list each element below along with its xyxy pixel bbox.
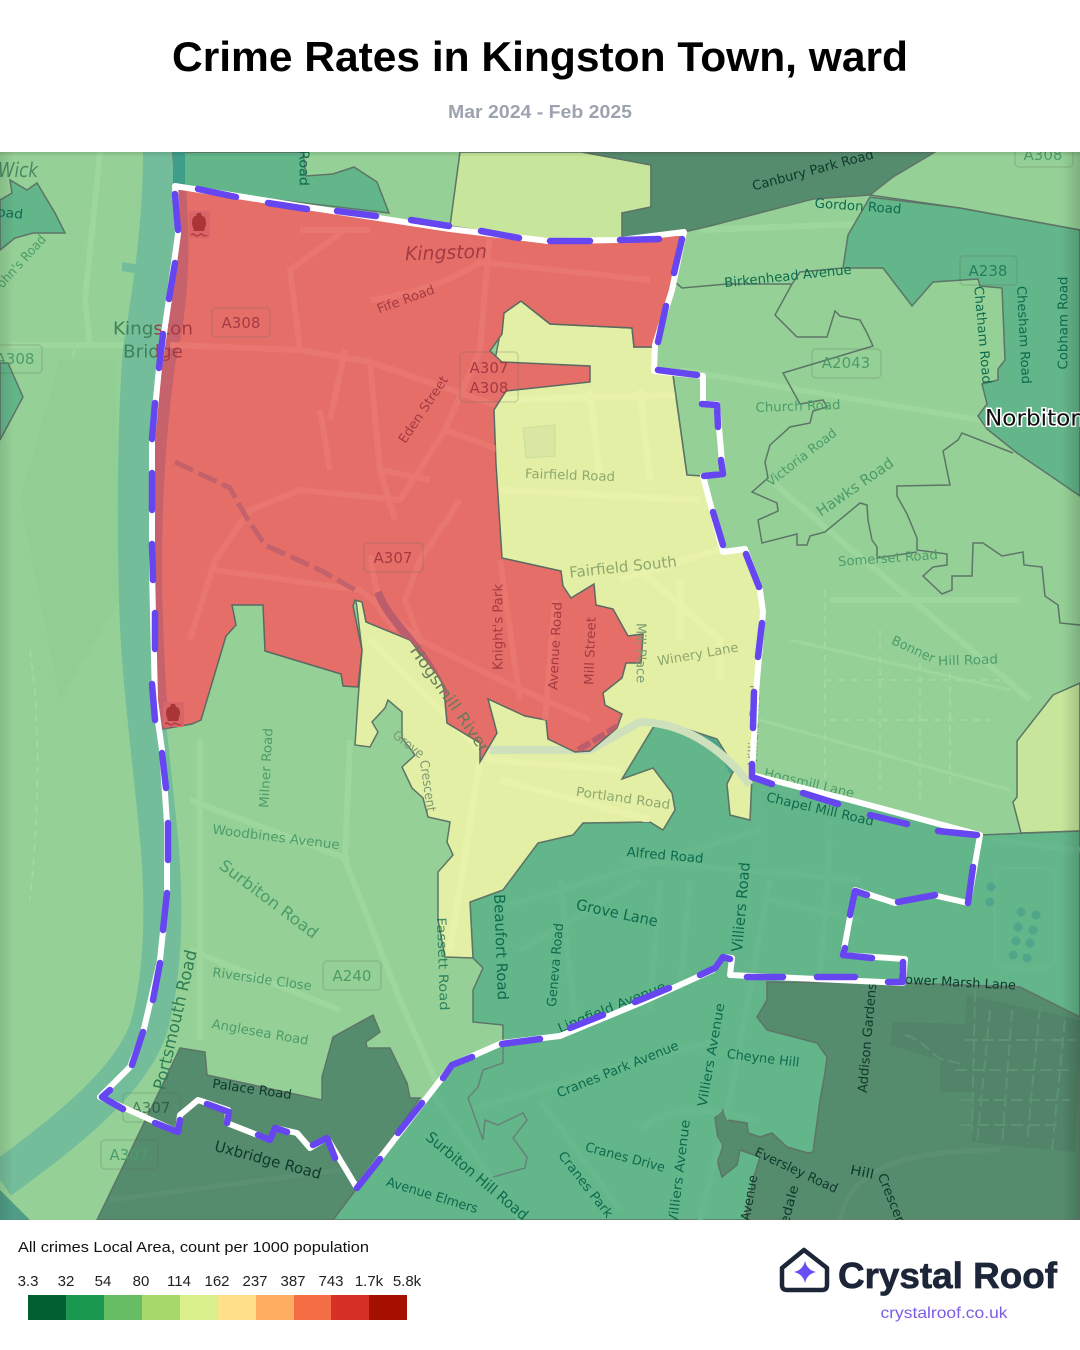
left darker parkland (44, 362, 72, 600)
road and place labels: Gordon Road (814, 196, 902, 218)
region: bottom-right dark green (715, 982, 1080, 1220)
legend values: 387 (280, 1273, 306, 1290)
road and place labels: Eden Street (396, 373, 452, 447)
road and place labels: Kingston (405, 241, 487, 265)
shield A307 centre (364, 543, 423, 572)
region: red Kingston centre (152, 188, 682, 762)
legend values: 162 (204, 1273, 230, 1290)
thin region line: Hawks to Bonner (897, 433, 1080, 625)
road and place labels: Kingston (113, 318, 193, 340)
shield A240 (323, 961, 381, 990)
estate street grid (905, 990, 1075, 1150)
road and place labels: Portland Road (575, 785, 671, 813)
Hogsmill River strip (490, 722, 750, 785)
road shields (0, 140, 1073, 1169)
river strip by Hogsmill bank (700, 734, 732, 774)
legend values: 54 (95, 1273, 111, 1290)
road and place labels: Surbiton Road (216, 856, 322, 942)
thin region line: Birkenhead to Somerset (675, 268, 917, 558)
river Thames (0, 152, 162, 1180)
road and place labels: Mill Place (632, 623, 648, 683)
road and place labels: Lower Marsh Lane (898, 972, 1016, 994)
thin region line: top right (870, 195, 1080, 230)
road and place labels: Fife Road (375, 283, 437, 317)
road and place labels: Villiers Avenue (666, 1119, 694, 1225)
road and place labels: Mill Street (582, 617, 600, 685)
shield A308 west: A308 (222, 314, 260, 332)
road and place labels: Hill Road (938, 652, 998, 670)
road and place labels: Winery Lane (656, 640, 740, 670)
road and place labels: Bridge (123, 342, 183, 362)
shield A308 top (1015, 140, 1073, 167)
road and place labels: Palace Road (211, 1077, 293, 1103)
region: top-left mid green (173, 152, 389, 213)
mid green streets (516, 847, 1080, 1220)
river tint band under red (155, 190, 188, 729)
railway dashes (175, 462, 355, 590)
pale streets (170, 342, 547, 720)
road and place labels: Grove Lane (575, 896, 659, 930)
legend values: 32 (58, 1273, 74, 1290)
region: left mid green (0, 180, 65, 250)
road and place labels: Bonner (889, 633, 938, 667)
road and place labels: Fairfield South (568, 552, 678, 582)
faint roads on light green (10, 152, 1080, 1090)
region: far-right yellow-green (1013, 683, 1080, 833)
road and place labels: Avenue Elmers (384, 1175, 480, 1217)
faint dashed tracks on light green (30, 350, 1000, 900)
yellow ward streets (640, 392, 676, 822)
thin region line: Surbiton Hill (468, 1043, 527, 1177)
subtitle: date range: Mar 2024 - Feb 2025 (448, 102, 632, 122)
teal river strip at top (173, 152, 185, 188)
region: top dark green (582, 152, 935, 238)
road and place labels: Uxbridge Road (213, 1137, 323, 1183)
legend values: 743 (318, 1273, 344, 1290)
road and place labels: Chatham Road (970, 286, 994, 384)
road and place labels: Crescent (874, 1171, 910, 1233)
legend values: 237 (242, 1273, 268, 1290)
road and place labels: Geneva Road (545, 923, 567, 1007)
shield A307 A308: A307 (470, 359, 508, 377)
road and place labels: Hogsmill River (406, 642, 494, 756)
map edge vignette (0, 152, 1080, 1220)
shield A307 A308 (460, 352, 518, 402)
region: bottom-left dark green (97, 1015, 420, 1220)
icon: ferry south (163, 702, 184, 727)
legend (18, 1239, 422, 1320)
road and place labels: Beaufort Road (490, 894, 512, 1000)
road and place labels: Cobham Road (1056, 276, 1072, 370)
region: right mid green (843, 197, 1080, 496)
road and place labels: Cheyne Hill (726, 1047, 800, 1071)
icon: ferry north (189, 211, 210, 238)
road and place labels: Fassett Road (433, 917, 451, 1011)
wordmark: Crystal Roof (838, 1255, 1058, 1296)
road and place labels: Hogsmill Lane (762, 766, 856, 802)
shield A240: A240 (333, 967, 371, 985)
base light green area (0, 152, 1080, 1220)
road and place labels: Lingfield Avenue (556, 980, 668, 1036)
shield A238 (960, 256, 1017, 285)
small pool near river (122, 262, 136, 273)
road and place labels: Crescent (416, 759, 438, 813)
icon: house with star (782, 1250, 827, 1290)
road and place labels: Villiers Road (746, 685, 764, 765)
road and place labels: Addison Gardens (856, 982, 880, 1093)
Hogsmill end in red (578, 726, 618, 750)
road and place labels: Woodbines Avenue (212, 823, 340, 853)
legend values: 5.8k (393, 1273, 422, 1290)
road and place labels: Church Road (755, 398, 841, 416)
Crystal Roof logo (782, 1250, 1058, 1322)
road and place labels: Fairfield Road (525, 467, 615, 485)
red area details (150, 188, 650, 750)
road and place labels: Road (296, 150, 310, 186)
road and place labels: Cranes Park (554, 1149, 616, 1222)
road and place labels: Cranes Park Avenue (555, 1039, 681, 1101)
shield A307 A308: A308 (470, 379, 508, 397)
shield A308 top: A308 (1024, 146, 1062, 164)
bottom-left water corner (0, 1190, 30, 1220)
shield A307 lower (123, 1093, 180, 1122)
road and place labels: edale (778, 1184, 802, 1226)
shield A308 far left (0, 345, 42, 373)
road and place labels: Alfred Road (626, 845, 704, 867)
road and place labels: Villiers Road (728, 861, 754, 953)
sports pitch dots (986, 882, 1040, 962)
road and place labels: Canbury Park Road (751, 148, 875, 194)
road and place labels: Portsmouth Road (150, 948, 202, 1092)
road and place labels: Chapel Mill Road (765, 790, 875, 830)
road and place labels: Anglesea Road (210, 1017, 310, 1049)
legend values: 3.3 (18, 1273, 38, 1290)
shield A307 lower: A307 (132, 1099, 170, 1117)
region: top yellow-green (450, 152, 651, 241)
region: yellow Fairfield South (355, 301, 763, 958)
shield A2043 (812, 349, 881, 378)
park patch in Fairfield (523, 425, 555, 458)
website: crystalroof.co.uk (880, 1305, 1009, 1322)
shield A307 centre: A307 (374, 549, 412, 567)
region: mid green south and east (333, 721, 1080, 1220)
road and place labels: Avenue (739, 1174, 761, 1222)
road and place labels: Norbiton (985, 406, 1080, 432)
legend values (18, 1273, 422, 1290)
road and place labels: Riverside Close (211, 966, 313, 994)
road and place labels: Hawks Road (813, 454, 897, 520)
road and place labels: Somerset Road (838, 548, 938, 570)
darker estate blocks in bottom-right (890, 995, 1080, 1152)
road and place labels: Surbiton Hill Road (422, 1128, 532, 1224)
road and place labels: Chesham Road (1013, 286, 1033, 384)
legend title: All crimes Local Area, count per 1000 population (18, 1239, 369, 1256)
ward boundary: white line with purple dashes (100, 186, 980, 1188)
title: Crime Rates in Kingston Town, ward (172, 33, 908, 80)
road and place labels: Grove (389, 728, 427, 762)
road and place labels: Birkenhead Avenue (724, 263, 852, 291)
shield A2043: A2043 (822, 354, 870, 372)
region: lower-left mid green (0, 363, 23, 440)
legend values: 114 (167, 1273, 191, 1290)
legend values: 80 (133, 1273, 149, 1290)
shield A238: A238 (969, 262, 1007, 280)
road and place labels: Knight's Park (492, 584, 506, 670)
shield A307 lowest (101, 1140, 158, 1169)
region separator sliver (673, 375, 687, 475)
road and place labels: Eversley Road (752, 1145, 840, 1197)
road and place labels: Avenue Road (546, 602, 566, 690)
shield A307 lowest: A307 (110, 1146, 148, 1164)
road and place labels: Villiers Avenue (695, 1002, 729, 1108)
road and place labels: Hill (849, 1163, 875, 1183)
legend values: 1.7k (355, 1273, 384, 1290)
Hogsmill band through red (378, 592, 445, 695)
road and place labels: Cranes Drive (583, 1140, 667, 1176)
legend colour ramp (28, 1295, 407, 1320)
road and place labels: Victoria Road (764, 426, 840, 490)
road and place labels: Milner Road (257, 728, 277, 808)
street tone on bottom dark areas (838, 1219, 842, 1220)
shield A308 west (212, 308, 270, 337)
